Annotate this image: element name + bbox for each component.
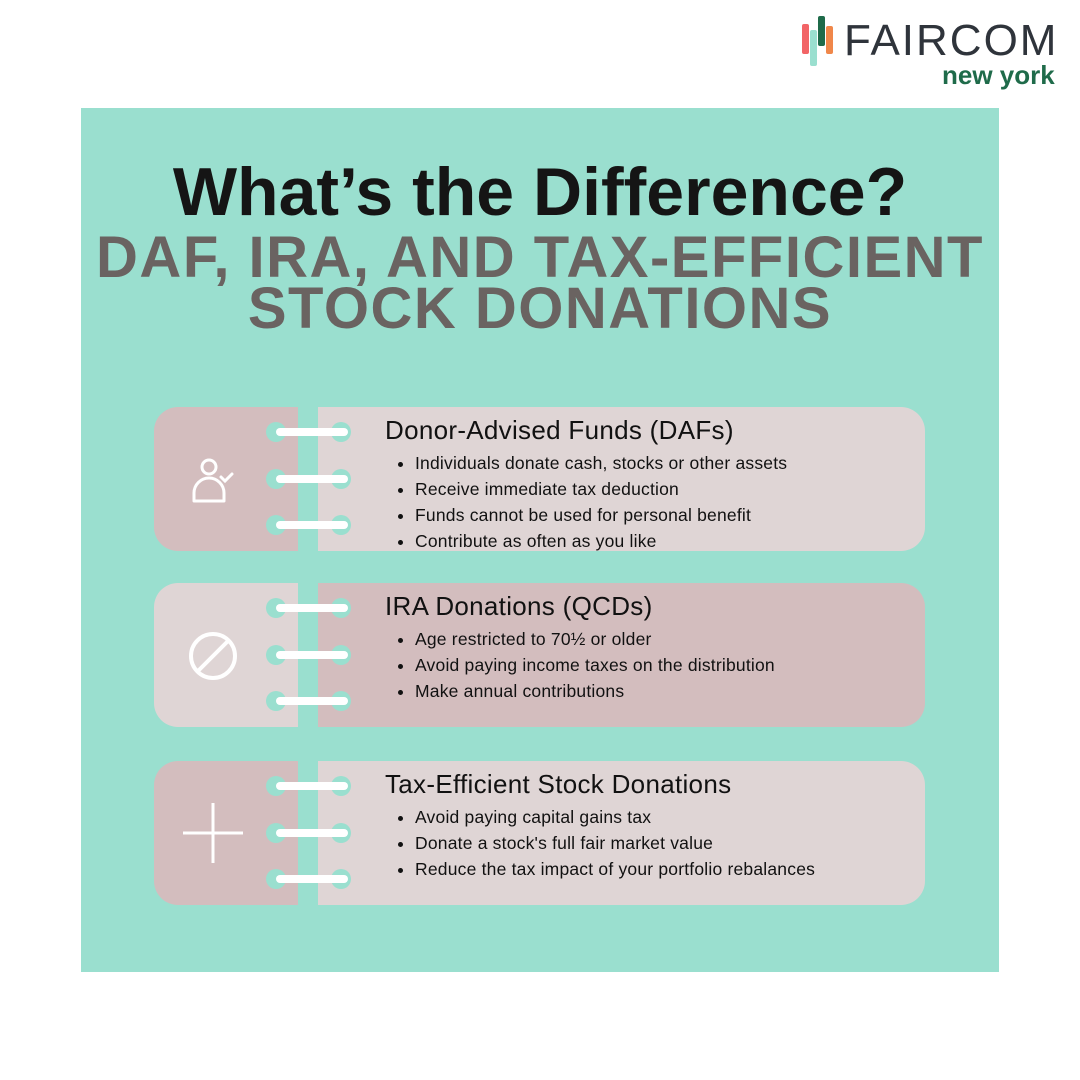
- text: IRA: IRA Donations (QCDs): [385, 591, 653, 621]
- text: DAFs: Receive immediate tax deduction: [415, 479, 679, 499]
- text: stock: Reduce the tax impact of your portfolio rebalances: [415, 859, 815, 879]
- subtitle: [96, 225, 984, 341]
- text: IRA: Avoid paying income taxes on the distribution: [415, 655, 775, 675]
- text: stock: Donate a stock's full fair market value: [415, 833, 713, 853]
- title: What’s the Difference?: [173, 154, 907, 230]
- text: IRA: [385, 591, 775, 701]
- subtitle: DAF, IRA, AND TAX-EFFICIENT: [96, 225, 984, 290]
- card: DAFs: [154, 407, 925, 551]
- text: stock: Tax-Efficient Stock Donations: [385, 769, 731, 799]
- logo: new york: [942, 60, 1055, 90]
- text: DAFs: Funds cannot be used for personal benefit: [415, 505, 751, 525]
- text: IRA: Make annual contributions: [415, 681, 624, 701]
- icon: person check: [192, 458, 234, 502]
- text: DAFs: Contribute as often as you like: [415, 531, 657, 551]
- logo: [802, 16, 1058, 90]
- card: IRA: [154, 583, 925, 727]
- text: IRA: Age restricted to 70½ or older: [415, 629, 652, 649]
- subtitle: STOCK DONATIONS: [248, 276, 832, 341]
- text: DAFs: [385, 415, 787, 551]
- card: stock: [154, 761, 925, 905]
- logo: FAIRCOM: [844, 16, 1058, 65]
- text: DAFs: Individuals donate cash, stocks or other assets: [415, 453, 787, 473]
- text: DAFs: Donor-Advised Funds (DAFs): [385, 415, 734, 445]
- icon: prohibited: [189, 632, 237, 680]
- text: stock: [385, 769, 815, 879]
- teal background panel: [81, 108, 999, 972]
- icon: plus: [183, 803, 243, 863]
- text: stock: Avoid paying capital gains tax: [415, 807, 651, 827]
